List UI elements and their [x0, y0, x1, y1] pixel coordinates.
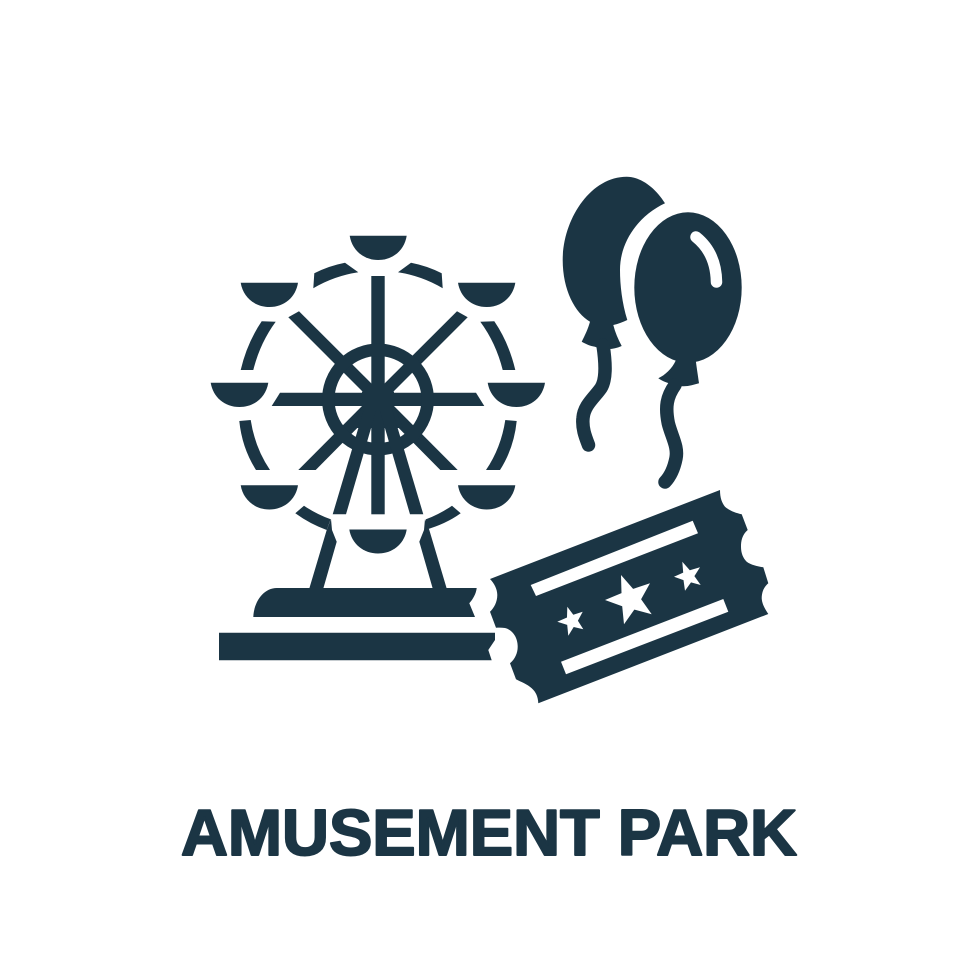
right balloon string: [665, 385, 676, 482]
balloon highlight: [696, 237, 716, 282]
left balloon string: [583, 345, 605, 445]
right balloon: [634, 212, 742, 363]
wheel cabins: [211, 236, 545, 553]
lower base: [219, 633, 495, 660]
icon: balloons: [563, 177, 742, 482]
icon: ferris wheel: [211, 236, 545, 660]
wheel rim segments: [239, 263, 517, 530]
right balloon knot: [658, 360, 699, 386]
wheel spokes and hub: [272, 276, 484, 514]
ticket large star: [605, 575, 652, 624]
ticket bottom stripe: [561, 599, 728, 674]
wheel support legs: [309, 410, 447, 588]
ticket left star: [557, 607, 583, 636]
ticket right star: [674, 562, 701, 591]
left balloon: [563, 177, 665, 349]
ticket top stripe: [531, 521, 698, 596]
upper base: [253, 588, 477, 617]
icon: ticket: [490, 490, 768, 703]
title: AMUSEMENT PARK: [181, 796, 797, 869]
ticket body: [490, 490, 768, 703]
